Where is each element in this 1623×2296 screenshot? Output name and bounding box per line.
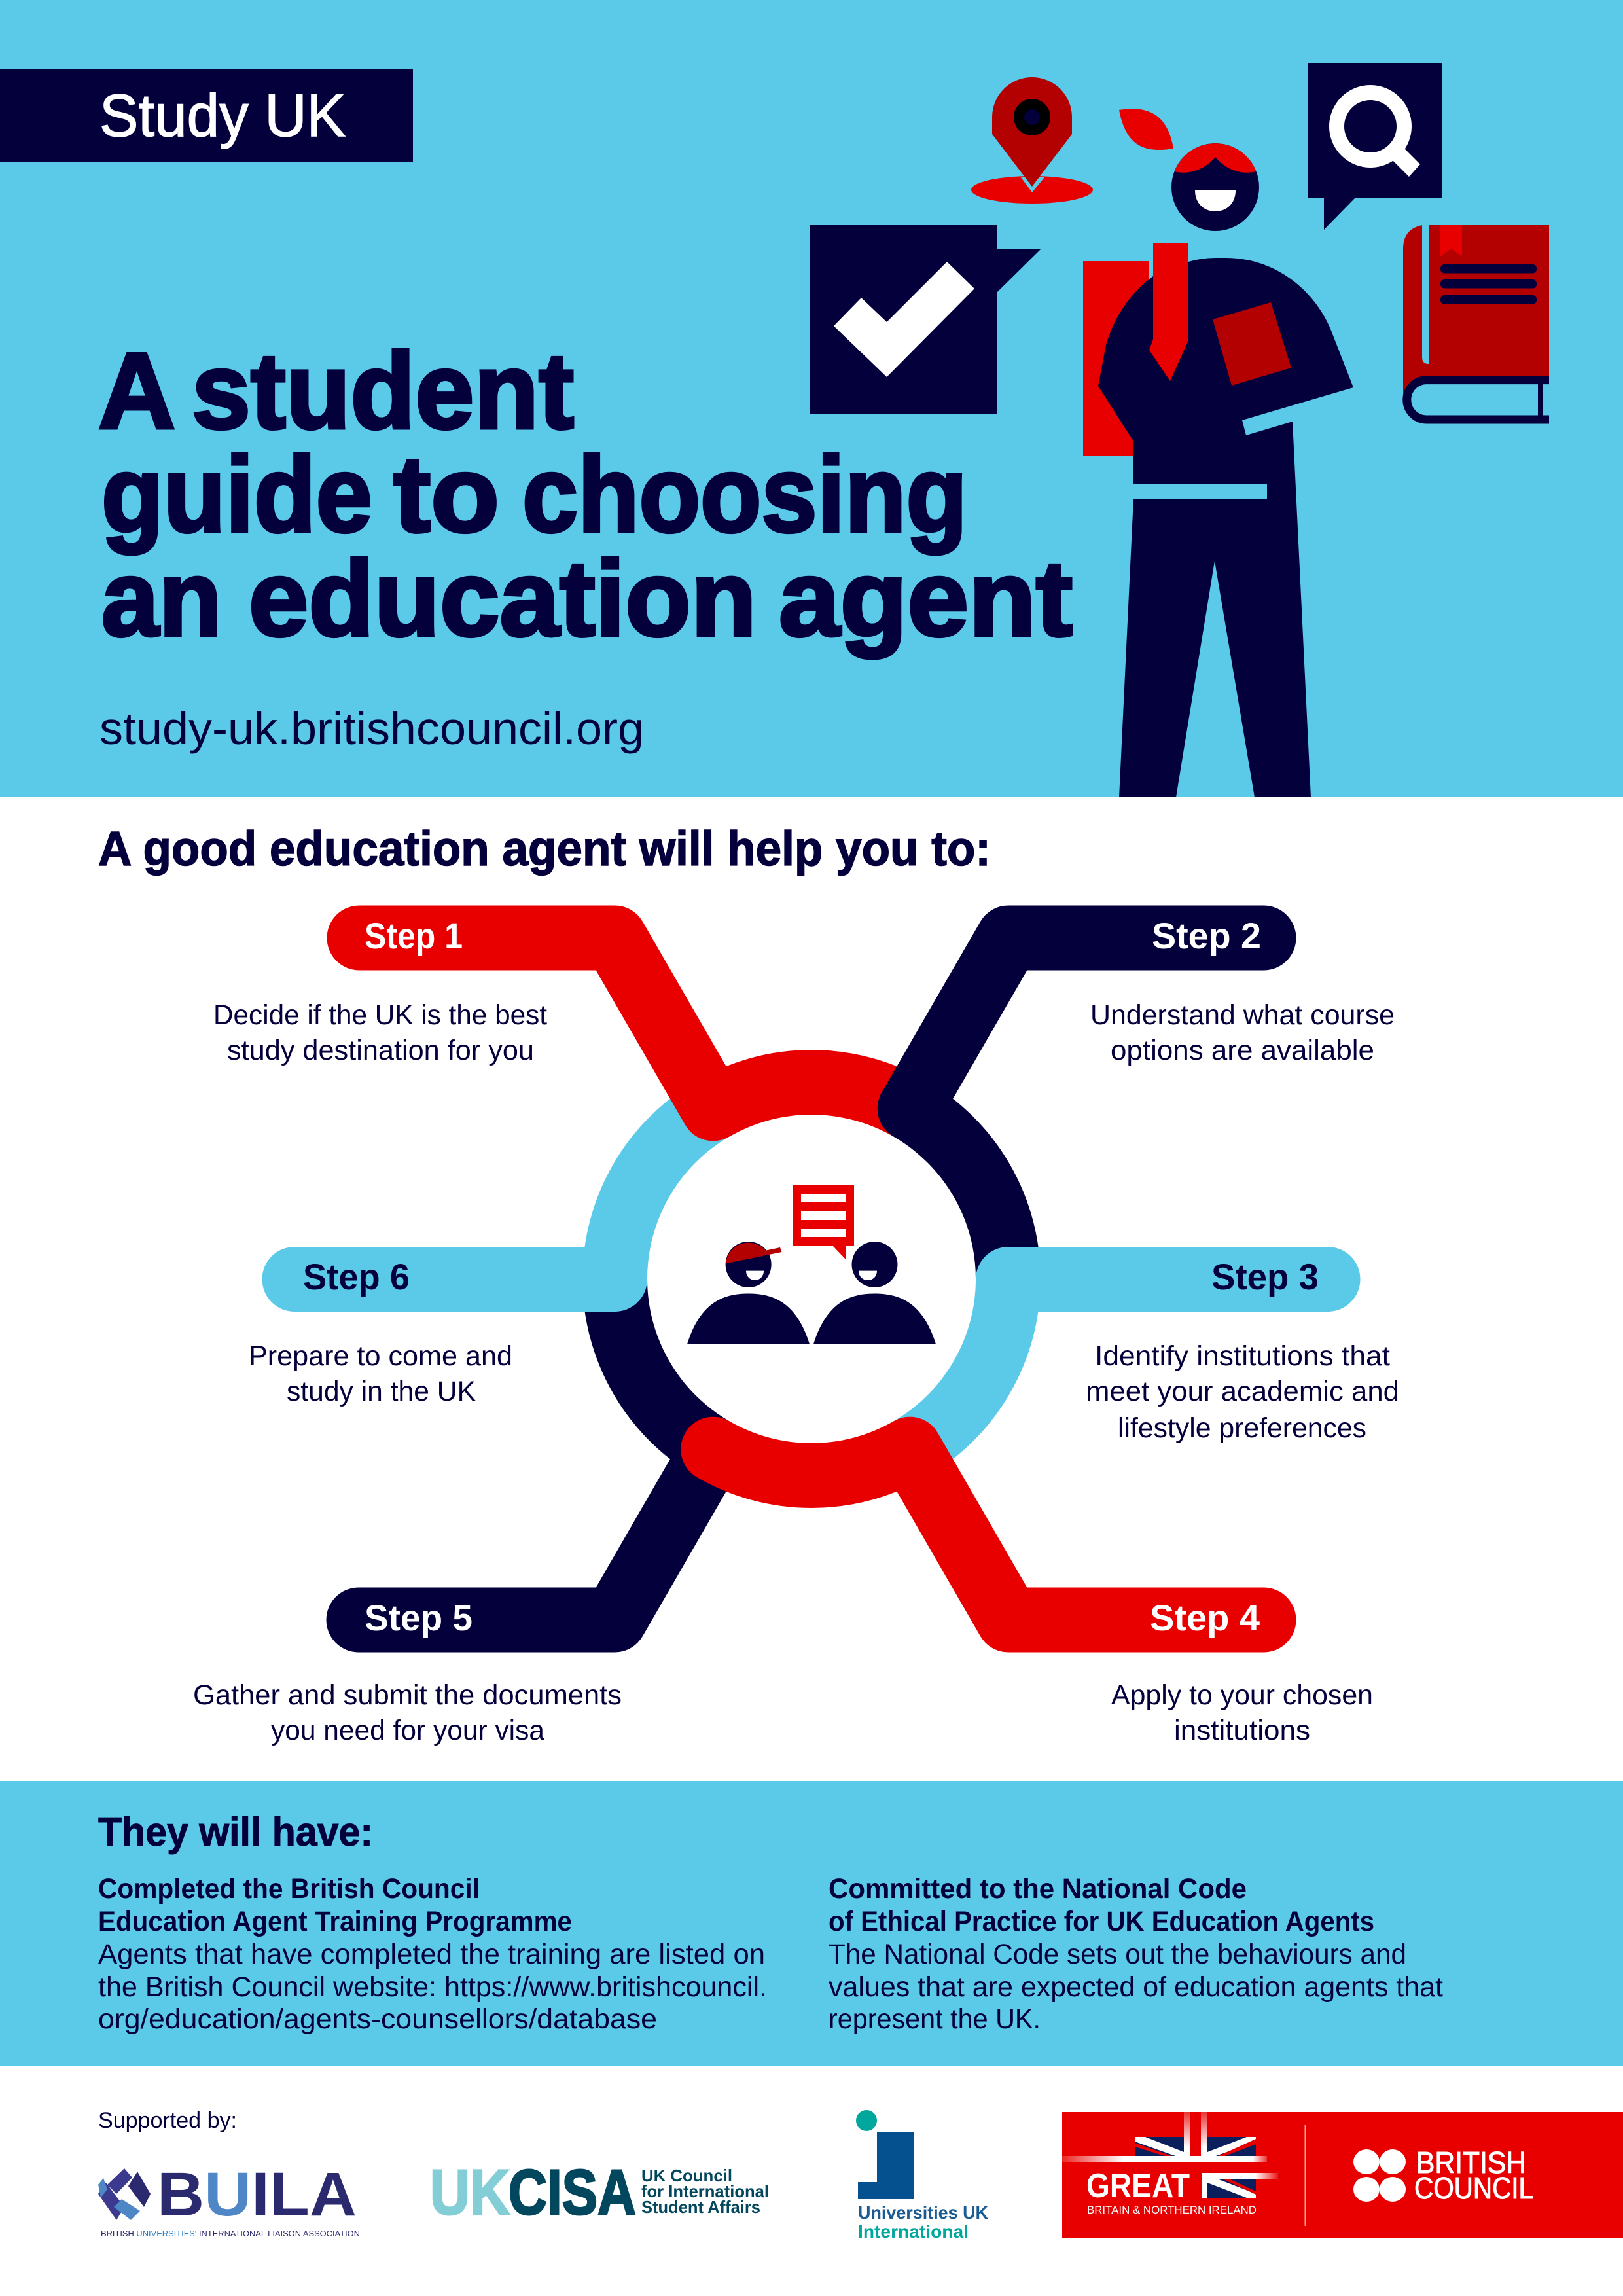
title: student bbox=[192, 331, 574, 451]
logo: BUILA: BRITISH UNIVERSITIES' INTERNATIONAL LIAISON ASSOCIATION bbox=[101, 2229, 360, 2238]
logo: UKCISA: Student Affairs bbox=[641, 2197, 760, 2217]
panel: they will have bbox=[0, 1781, 1623, 2066]
icon: checkmark speech bubble bbox=[810, 225, 1041, 414]
logo: Universities UK International: Universities UK bbox=[858, 2202, 988, 2223]
logo: UKCISA: UK Council bbox=[641, 2166, 732, 2185]
heading: they will have: They will have: bbox=[98, 1810, 373, 1855]
title: an bbox=[101, 538, 222, 658]
logo: UKCISA bbox=[430, 2157, 769, 2228]
step 1 text: Decide if the UK is the best bbox=[213, 999, 547, 1031]
step 5 text: Gather and submit the documents bbox=[193, 1679, 622, 1711]
step 2 connector bbox=[910, 938, 1264, 1279]
supported by label: Supported by: bbox=[98, 2108, 237, 2133]
text block: training programme bbox=[98, 1873, 767, 2035]
step 3 connector bbox=[910, 1279, 1328, 1449]
step 2 text bbox=[1090, 999, 1395, 1066]
step 4 connector bbox=[713, 1449, 1264, 1620]
website url: study-uk.britishcouncil.org bbox=[99, 703, 644, 754]
title: choosing bbox=[522, 434, 967, 554]
step 1 text bbox=[213, 999, 547, 1066]
step 5 text bbox=[193, 1679, 622, 1746]
step 4 text: institutions bbox=[1174, 1715, 1310, 1746]
GREAT wordmark: GREAT bbox=[1086, 2167, 1190, 2205]
step 6 text: Prepare to come and bbox=[249, 1340, 512, 1372]
title: guide bbox=[101, 434, 372, 554]
logo: British Council bbox=[1353, 2145, 1533, 2205]
badge: Study UK bbox=[0, 69, 413, 162]
step 5 text: you need for your visa bbox=[271, 1715, 544, 1746]
heading: a good education agent: A good education agent will help you to: bbox=[98, 821, 991, 876]
step 4 text bbox=[1111, 1679, 1373, 1746]
icon: book bbox=[1403, 225, 1549, 420]
title: agent bbox=[779, 538, 1073, 658]
step labels: Step 4 bbox=[1150, 1597, 1260, 1638]
illustration: student with icons bbox=[810, 63, 1549, 797]
step 6 text: study in the UK bbox=[287, 1376, 476, 1407]
icon: two people talking bbox=[687, 1185, 936, 1344]
step 3 text: Identify institutions that bbox=[1095, 1340, 1390, 1372]
GREAT strapline: BRITAIN & NORTHERN IRELAND bbox=[1087, 2204, 1257, 2216]
text block: national code bbox=[829, 1873, 1443, 2035]
step 3 text bbox=[1086, 1340, 1399, 1444]
step labels: Step 5 bbox=[365, 1597, 473, 1638]
panel: hero background bbox=[0, 0, 1623, 797]
logo: British Council: COUNCIL bbox=[1414, 2171, 1533, 2205]
step 5 connector bbox=[359, 1279, 713, 1620]
icon: leaf bbox=[1119, 109, 1173, 150]
text block: national code: of Ethical Practice for UK Education Agents bbox=[829, 1906, 1374, 1937]
logo: Universities UK International bbox=[856, 2110, 988, 2242]
step 3 text: lifestyle preferences bbox=[1118, 1412, 1366, 1444]
step labels bbox=[303, 915, 1319, 1638]
logo panel: GREAT and British Council bbox=[1062, 2112, 1623, 2238]
logo: BUILA bbox=[98, 2160, 360, 2238]
title: education bbox=[249, 538, 757, 658]
step 6 text bbox=[249, 1340, 512, 1407]
step 2 text: Understand what course bbox=[1090, 999, 1395, 1031]
badge: Study UK: Study UK bbox=[99, 82, 346, 149]
step labels: Step 2 bbox=[1152, 915, 1261, 956]
text block: training programme: Agents that have completed the training are listed on bbox=[98, 1939, 765, 1970]
text block: national code: values that are expected of education agents that bbox=[829, 1971, 1443, 2003]
text block: national code: Committed to the National Code bbox=[829, 1873, 1247, 1905]
step labels: Step 3 bbox=[1211, 1256, 1319, 1297]
text block: training programme: Completed the British Council bbox=[98, 1873, 480, 1905]
logo: GREAT flag bbox=[1062, 2112, 1278, 2198]
text block: national code: represent the UK. bbox=[829, 2003, 1041, 2035]
student figure bbox=[1083, 143, 1353, 797]
step 3 text: meet your academic and bbox=[1086, 1376, 1399, 1407]
step descriptions bbox=[193, 999, 1399, 1746]
icon: map pin bbox=[971, 77, 1093, 204]
diagram: six-step ring bbox=[294, 938, 1328, 1620]
step 4 text: Apply to your chosen bbox=[1111, 1679, 1373, 1711]
logo: Universities UK International: International bbox=[858, 2221, 969, 2242]
title: to bbox=[393, 434, 499, 554]
text block: training programme: the British Council website: https://www.britishcouncil. bbox=[98, 1971, 767, 2003]
text block: national code: The National Code sets out the behaviours and bbox=[829, 1939, 1406, 1970]
step 2 text: options are available bbox=[1111, 1035, 1374, 1066]
icon: magnifier speech bubble bbox=[1308, 63, 1442, 230]
step labels: Step 1 bbox=[365, 915, 463, 956]
step labels: Step 6 bbox=[303, 1256, 410, 1297]
logo: BUILA: BUILA bbox=[157, 2160, 357, 2229]
text block: training programme: org/education/agents-counsellors/database bbox=[98, 2003, 657, 2035]
step 1 text: study destination for you bbox=[227, 1035, 534, 1066]
step 1 connector bbox=[359, 938, 910, 1109]
logo: UKCISA: UK bbox=[430, 2157, 510, 2228]
text block: training programme: Education Agent Training Programme bbox=[98, 1906, 572, 1937]
logo: UKCISA: for International bbox=[641, 2181, 769, 2201]
title: A bbox=[98, 331, 175, 451]
logo: British Council: BRITISH bbox=[1416, 2145, 1526, 2179]
logo: UKCISA: CISA bbox=[508, 2157, 636, 2228]
title bbox=[98, 331, 1073, 658]
step 6 connector bbox=[294, 1109, 713, 1279]
